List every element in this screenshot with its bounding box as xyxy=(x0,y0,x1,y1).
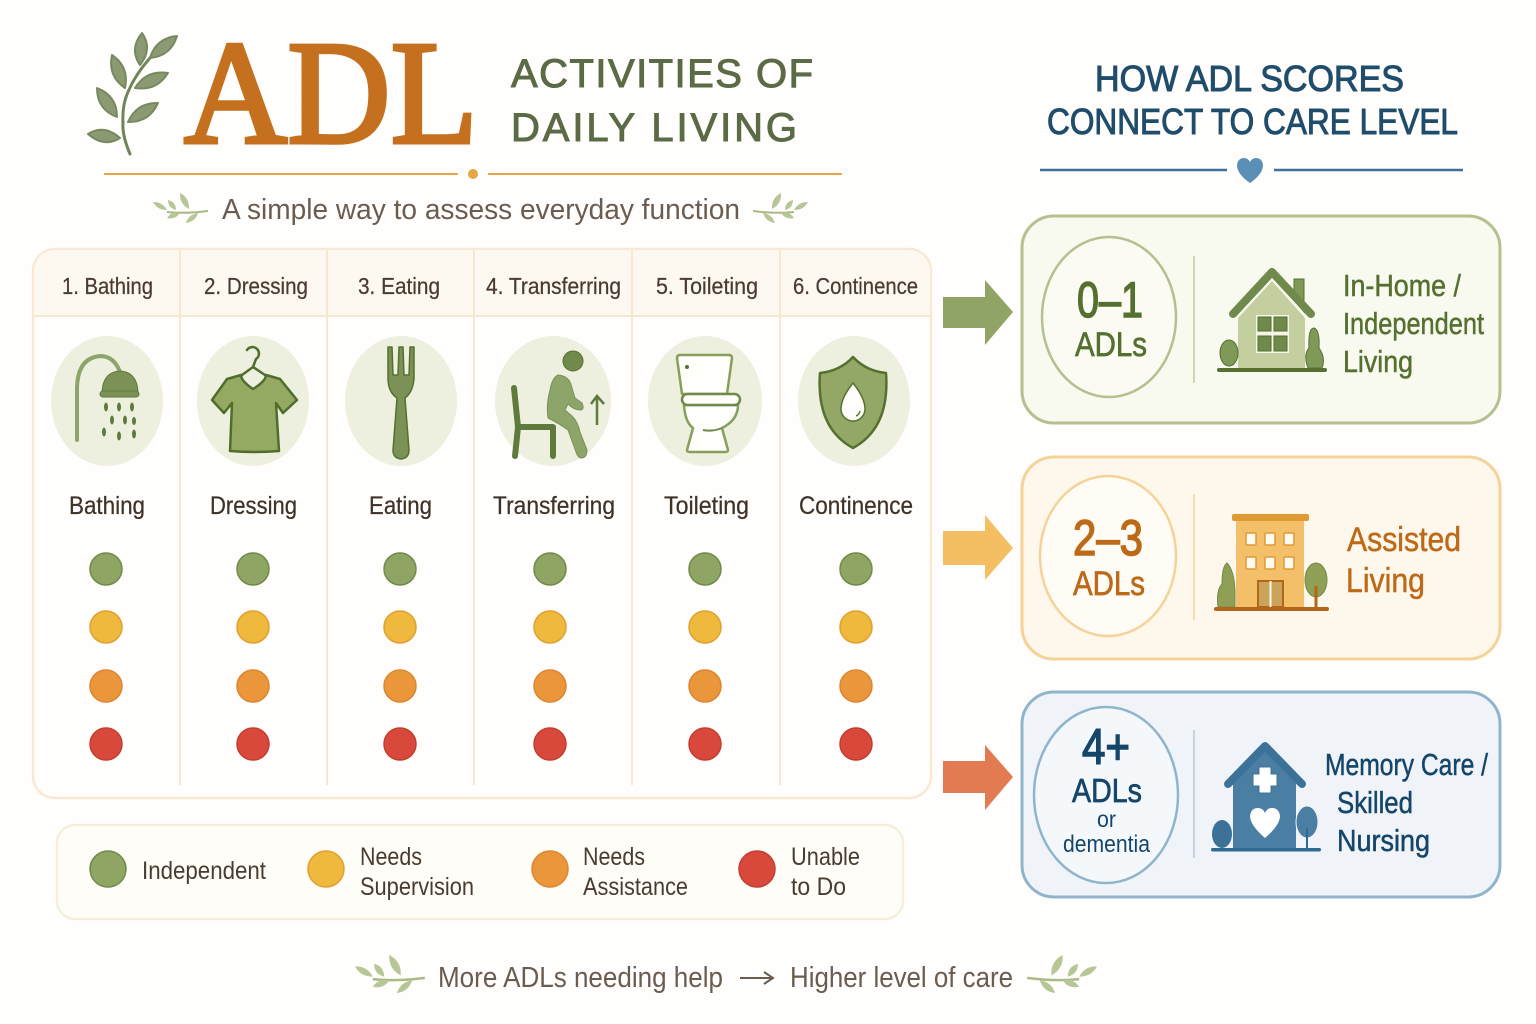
icon: person rising from chair xyxy=(495,336,611,466)
panel: legend xyxy=(57,825,903,919)
label: in-home independent living: Independent xyxy=(1343,306,1484,341)
legend: independent xyxy=(90,851,266,887)
icon: assisted living building xyxy=(1214,514,1329,611)
column labels: Continence xyxy=(799,492,913,520)
label: in-home independent living: Living xyxy=(1343,344,1413,379)
score badge: 2-3 xyxy=(1040,476,1176,636)
icon: shirt on hanger xyxy=(197,336,309,466)
legend: unable to do: Unable xyxy=(791,843,860,871)
column labels: Eating xyxy=(369,492,432,520)
column headers: 4. Transferring xyxy=(486,273,621,299)
subtitle: A simple way to assess everyday function xyxy=(222,194,740,226)
panel: memory care level xyxy=(1022,692,1500,897)
column headers: 6. Continence xyxy=(793,273,918,299)
icon: shower xyxy=(51,336,163,466)
legend: needs assistance: Assistance xyxy=(583,873,688,901)
arrow: to assisted living xyxy=(943,515,1013,580)
score badge: 2-3: 2–3 xyxy=(1073,510,1143,566)
heading: how ADL scores connect xyxy=(1047,58,1458,142)
icon: footer right sprig xyxy=(1027,955,1097,993)
icon: toilet xyxy=(648,336,762,466)
icon: olive branch xyxy=(88,33,177,154)
arrow: to memory care xyxy=(943,745,1013,810)
heading: how ADL scores connect: CONNECT TO CARE LEVEL xyxy=(1047,101,1458,142)
score badge: 4+: dementia xyxy=(1063,831,1151,858)
legend: unable to do xyxy=(739,843,860,901)
rating dots: unable to do xyxy=(90,728,872,760)
panel: ADL table xyxy=(33,249,931,798)
label: memory care skilled nursing: Memory Care / xyxy=(1325,747,1488,782)
panel: assisted living care level xyxy=(1022,457,1500,659)
divider with heart xyxy=(1040,158,1463,183)
rating dots: independent xyxy=(90,553,872,585)
column headers: 3. Eating xyxy=(358,273,440,299)
arrow: to in-home xyxy=(943,280,1013,345)
legend: needs supervision xyxy=(308,843,474,901)
label: memory care skilled nursing: Nursing xyxy=(1337,823,1430,858)
column labels: Toileting xyxy=(664,492,749,520)
legend: needs assistance xyxy=(532,843,688,901)
label: memory care skilled nursing xyxy=(1325,747,1488,858)
legend: independent: Independent xyxy=(142,857,266,885)
icon: shield with drop xyxy=(798,336,910,466)
legend: unable to do: to Do xyxy=(791,873,846,901)
header: ADL title xyxy=(88,12,813,176)
legend: needs assistance: Needs xyxy=(583,843,645,871)
score badge: 0-1: 0–1 xyxy=(1077,272,1143,328)
column headers xyxy=(62,273,918,299)
icon: subtitle right sprig xyxy=(753,193,808,223)
column headers: 5. Toileting xyxy=(656,273,758,299)
panel: in-home care level xyxy=(1022,216,1500,423)
icon: subtitle left sprig xyxy=(153,193,208,223)
label: assisted living: Living xyxy=(1346,562,1425,600)
title: activities of daily living: ACTIVITIES OF xyxy=(511,52,813,96)
score badge: 4+: ADLs xyxy=(1072,772,1142,809)
icon: care home with cross and heart xyxy=(1211,746,1321,852)
footer text: more ADLs: More ADLs needing help xyxy=(438,962,723,994)
label: assisted living xyxy=(1346,521,1461,600)
legend: needs supervision: Supervision xyxy=(360,873,474,901)
rating dots: needs assistance xyxy=(90,670,872,702)
column labels: Transferring xyxy=(493,492,615,520)
footer text: higher level: Higher level of care xyxy=(790,962,1013,994)
icon: fork xyxy=(345,336,457,466)
label: assisted living: Assisted xyxy=(1347,521,1461,559)
column labels: Dressing xyxy=(210,492,297,520)
score badge: 0-1: ADLs xyxy=(1075,326,1147,364)
column headers: 1. Bathing xyxy=(62,273,153,299)
icon: house xyxy=(1217,272,1327,372)
arrow: leads to xyxy=(740,972,773,984)
table header band xyxy=(34,250,930,316)
heading: how ADL scores connect: HOW ADL SCORES xyxy=(1095,58,1404,99)
footer note xyxy=(355,955,1097,994)
column headers: 2. Dressing xyxy=(204,273,308,299)
label: in-home independent living xyxy=(1343,268,1484,379)
label: in-home independent living: In-Home / xyxy=(1343,268,1461,303)
title: ADL: ADL xyxy=(184,12,478,176)
score badge: 4+: 4+ xyxy=(1082,719,1130,775)
rating dots: needs supervision xyxy=(90,611,872,643)
label: memory care skilled nursing: Skilled xyxy=(1337,785,1413,820)
score badge: 2-3: ADLs xyxy=(1073,565,1145,603)
column labels: Bathing xyxy=(69,492,145,520)
title: activities of daily living xyxy=(511,52,813,150)
divider with dot xyxy=(104,169,842,179)
score badge: 4+: or xyxy=(1097,806,1116,832)
score badge: 0-1 xyxy=(1042,237,1176,397)
title: activities of daily living: DAILY LIVING xyxy=(511,106,797,150)
icon: footer left sprig xyxy=(355,955,425,993)
legend: needs supervision: Needs xyxy=(360,843,422,871)
column labels xyxy=(69,492,913,520)
score badge: 4+ xyxy=(1034,707,1178,883)
